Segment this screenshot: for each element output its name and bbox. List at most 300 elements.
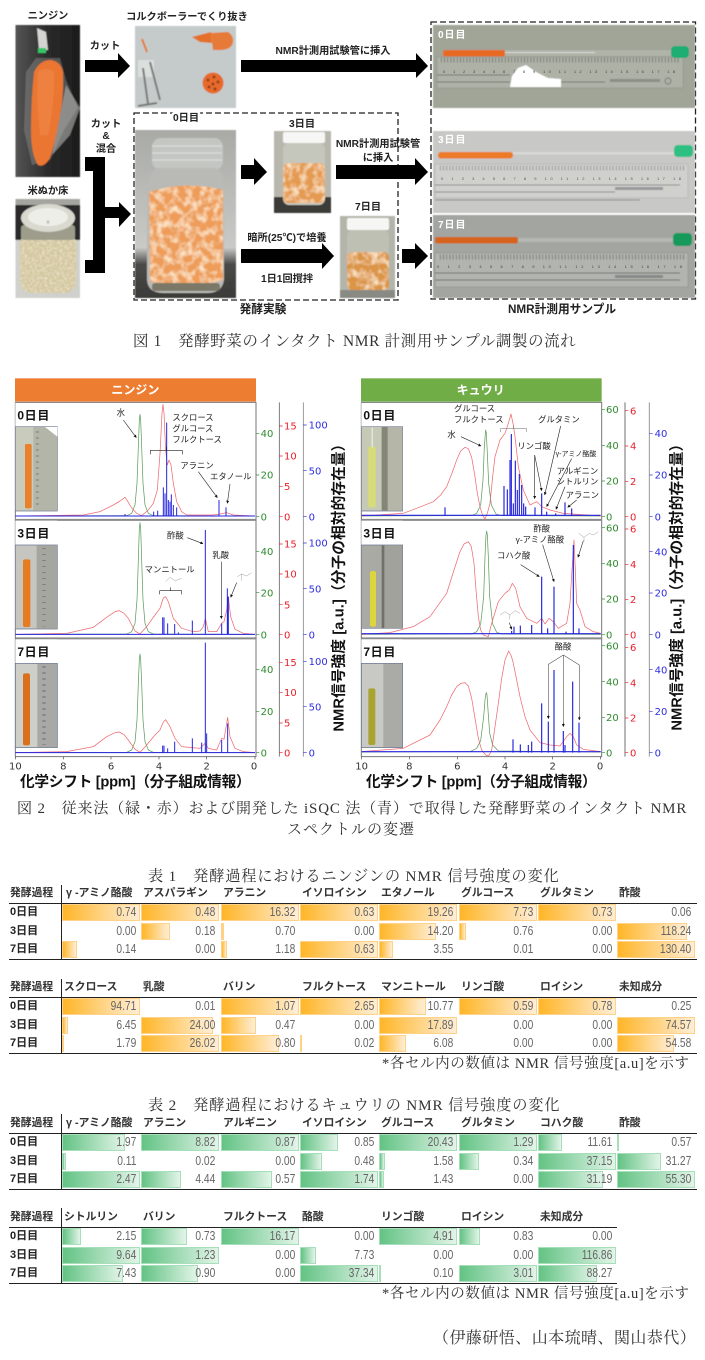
header row: γ -アミノ酪酸 xyxy=(66,1117,132,1129)
y axis title: cucumber: NMR信号強度 [a.u.]（分子の相対的存在量） xyxy=(668,437,686,731)
table 1a: carrot xyxy=(9,885,697,960)
green axis: cucumber: 60 xyxy=(606,405,619,416)
row day 3: 7.73 xyxy=(354,1248,374,1262)
row day 3: 3日目 xyxy=(10,924,38,936)
row day 3: 3日目 xyxy=(10,1018,38,1030)
label: NMR samples: NMR計測用サンプル xyxy=(508,302,616,316)
x ticks: carrot: 2 xyxy=(203,762,210,773)
header row: グルコース xyxy=(461,887,514,899)
row day 0: 8.82 xyxy=(195,1135,215,1149)
green axis: carrot: 0 xyxy=(261,512,267,523)
row day 3: 0.00 xyxy=(513,1018,533,1032)
row day 7: 7.43 xyxy=(116,1266,136,1280)
label: day 7 sample: 7日目 xyxy=(438,219,467,231)
annotations: cucumber: アルギニン xyxy=(557,466,598,476)
annotations: carrot: 水 xyxy=(117,407,126,417)
annotations: cucumber: 水 xyxy=(447,429,456,439)
caption: figure 1: 図 1 発酵野菜のインタクト NMR 計測用サンプル調製の流れ xyxy=(133,333,576,350)
spectrum: carrot day 3 xyxy=(15,523,255,634)
header row: グルタミン xyxy=(461,1117,515,1129)
header row: リンゴ酸 xyxy=(461,981,504,993)
arrow: day 0 to day 7 xyxy=(241,243,334,269)
header row xyxy=(10,1116,641,1129)
inset: cucumber day 3: 3日目 xyxy=(363,526,396,540)
green axis: carrot: 20 xyxy=(261,588,273,599)
red axis: carrot: 15 xyxy=(284,422,297,433)
header row: 発酵過程 xyxy=(10,887,53,899)
row day 3: 0.48 xyxy=(354,1154,374,1168)
label: fermentation experiment: 発酵実験 xyxy=(240,302,287,316)
blue axis: carrot: 0 xyxy=(309,630,315,641)
row day 7: 26.02 xyxy=(189,1036,215,1050)
header row xyxy=(10,980,662,993)
photo: NMR tube day 3 xyxy=(433,131,695,213)
label: day 3 sample: 3日目 xyxy=(438,134,467,146)
x ticks: carrot: 8 xyxy=(60,762,67,773)
header row: マンニトール xyxy=(381,981,446,993)
label: incubation: 暗所(25℃)で培養 xyxy=(247,231,327,244)
red axis: carrot: 0 xyxy=(284,630,290,641)
label: cut and mix: & xyxy=(102,131,110,142)
header row: イソロイシン xyxy=(302,887,367,899)
row day 3: 0.34 xyxy=(513,1154,533,1168)
blue axis: carrot: 100 xyxy=(309,657,328,668)
green axis: cucumber: 20 xyxy=(606,477,619,488)
x ticks: cucumber: 2 xyxy=(549,762,556,773)
row day 7: 4.44 xyxy=(195,1172,215,1186)
row day 0: 0.73 xyxy=(592,905,612,919)
annotations: carrot: スクロース xyxy=(172,413,214,423)
annotations: cucumber: コハク酸 xyxy=(497,551,531,561)
header row: フルクトース xyxy=(302,981,366,993)
chart: carrot spectra xyxy=(9,378,347,791)
row day 0: 0.57 xyxy=(671,1135,691,1149)
red axis: cucumber: 6 xyxy=(630,406,636,417)
blue axis: carrot: 50 xyxy=(309,584,321,595)
row day 7: 0.00 xyxy=(275,1266,295,1280)
row day 0: 0.83 xyxy=(513,1229,533,1243)
x ticks: cucumber: 10 xyxy=(355,762,368,773)
row day 7 xyxy=(10,941,695,958)
row day 0: 16.32 xyxy=(269,905,295,919)
green axis: cucumber: 60 xyxy=(606,641,619,652)
header row: グルタミン xyxy=(540,887,594,899)
header row: 酢酸 xyxy=(619,887,641,899)
header: carrot: ニンジン xyxy=(111,383,159,397)
header row: 発酵過程 xyxy=(10,981,53,993)
row day 7: 7日目 xyxy=(10,1267,38,1279)
label: insert into tube (2 lines): NMR計測用試験管 xyxy=(336,137,420,150)
row day 0: 20.43 xyxy=(427,1135,453,1149)
blue axis: cucumber: 40 xyxy=(655,547,667,558)
photo: NMR tube day 3: 0 1 2 3 4 5 6 7 8 9 10 11 12 13 14 15 16 17 18 xyxy=(441,176,682,181)
row day 0: 2.65 xyxy=(354,999,374,1013)
blue axis: carrot xyxy=(309,421,328,759)
row day 3: 0.00 xyxy=(592,924,612,938)
blue axis: cucumber: 20 xyxy=(655,707,667,718)
green axis: carrot: 20 xyxy=(261,471,273,482)
x ticks: cucumber: 8 xyxy=(406,762,413,773)
row day 0: 10.77 xyxy=(427,999,453,1013)
green axis: cucumber xyxy=(606,405,619,759)
row day 7: 0.02 xyxy=(354,1036,374,1050)
red axis: carrot: 0 xyxy=(284,748,290,759)
red axis: cucumber: 0 xyxy=(630,630,636,641)
header: carrot xyxy=(15,378,256,402)
annotations: cucumber: グルタミン xyxy=(538,414,580,424)
red axis: cucumber: 2 xyxy=(630,714,636,725)
x ticks: carrot: 10 xyxy=(9,762,22,773)
header row: γ -アミノ酪酸 xyxy=(66,887,132,899)
row day 7: 130.40 xyxy=(660,942,691,956)
green axis: cucumber: 0 xyxy=(606,512,612,523)
spectrum: cucumber day 0 xyxy=(362,414,601,519)
row day 3: 17.89 xyxy=(427,1018,453,1032)
arrow: to NMR sample day 0 xyxy=(241,53,428,78)
header row: ロイシン xyxy=(461,1211,504,1223)
row day 3: 0.00 xyxy=(433,1248,453,1262)
row day 0: 0.48 xyxy=(195,905,215,919)
red axis: carrot: 15 xyxy=(284,658,297,669)
row day 0: 0.00 xyxy=(592,1229,612,1243)
spectrum: carrot day 7 xyxy=(15,643,255,753)
inset: carrot day 3 xyxy=(15,521,57,629)
arrow: day 0 to day 3 xyxy=(241,158,267,185)
row day 0: 2.15 xyxy=(116,1229,136,1243)
header row: グルコース xyxy=(381,1117,434,1129)
green axis: cucumber: 40 xyxy=(606,441,619,452)
label: cork borer: コルクボーラーでくり抜き xyxy=(126,10,248,23)
arrow: bracket to jar xyxy=(85,157,131,273)
red axis: cucumber: 6 xyxy=(630,643,636,654)
row day 7: 55.30 xyxy=(665,1172,691,1186)
row day 7: 0.00 xyxy=(592,942,612,956)
row day 7: 2.47 xyxy=(116,1172,136,1186)
row day 0: 1.29 xyxy=(513,1135,533,1149)
header row: リンゴ酸 xyxy=(381,1211,424,1223)
red axis: cucumber: 2 xyxy=(630,595,636,606)
row day 7: 7日目 xyxy=(10,1037,38,1049)
green axis: carrot: 0 xyxy=(261,630,267,641)
table 1b: carrot xyxy=(9,979,697,1054)
photo: NMR tube day 0: 0 1 2 3 4 5 6 7 8 9 10 11 12 13 14 15 16 17 18 xyxy=(443,69,676,74)
label: cut and mix xyxy=(91,118,121,155)
row day 0: 0.63 xyxy=(354,905,374,919)
label: cut and mix: 混合 xyxy=(96,142,117,155)
row day 7: 7日目 xyxy=(10,943,38,955)
green axis: carrot: 40 xyxy=(261,429,273,440)
row day 3 xyxy=(10,1153,691,1170)
red axis: carrot xyxy=(284,422,297,759)
row day 0: 7.73 xyxy=(513,905,533,919)
label: insert into NMR tube: NMR計測用試験管に挿入 xyxy=(276,44,390,57)
header row: アスパラギン xyxy=(143,887,208,899)
row day 7: 0.00 xyxy=(513,1036,533,1050)
arrow: day 7 to NMR sample xyxy=(402,243,428,269)
row day 3: 6.45 xyxy=(116,1018,136,1032)
x ticks: carrot: 6 xyxy=(108,762,114,773)
photo: NMR tube day 0 xyxy=(433,25,695,108)
red axis: carrot: 5 xyxy=(284,482,290,493)
label: day 0 sample: 0日目 xyxy=(438,29,467,41)
blue axis: carrot: 0 xyxy=(309,512,315,523)
blue axis: carrot: 50 xyxy=(309,702,321,713)
blue axis: carrot: 100 xyxy=(309,421,328,432)
row day 0: 0.25 xyxy=(671,999,691,1013)
x ticks: carrot: 4 xyxy=(156,762,162,773)
panel: fermentation experiment xyxy=(134,112,428,300)
header row: アルギニン xyxy=(223,1117,277,1129)
row day 0: 94.71 xyxy=(110,999,136,1013)
row day 7: 0.00 xyxy=(195,942,215,956)
photo: NMR tube day 7: 0 1 2 3 4 5 6 7 8 9 10 11 12 13 14 15 16 17 18 xyxy=(437,264,683,269)
chart: cucumber spectra xyxy=(355,378,686,791)
row day 0: 0.73 xyxy=(195,1229,215,1243)
annotations: cucumber: 酢酸 xyxy=(533,524,551,534)
green axis: carrot: 40 xyxy=(261,547,273,558)
panel: NMR samples xyxy=(431,22,696,299)
row day 7 xyxy=(10,1265,612,1282)
header row: 酪酸 xyxy=(302,1211,324,1223)
blue axis: carrot: 100 xyxy=(309,539,328,550)
red axis: cucumber: 4 xyxy=(630,442,636,453)
row day 7: 1.18 xyxy=(275,942,295,956)
row day 0: 0.01 xyxy=(195,999,215,1013)
row day 3: 0.02 xyxy=(195,1154,215,1168)
x axis title: cucumber: 化学シフト [ppm]（分子組成情報） xyxy=(366,773,597,791)
row day 3: 0.00 xyxy=(116,924,136,938)
inset: carrot day 7 xyxy=(15,639,57,748)
inset: cucumber day 0 xyxy=(361,403,403,511)
annotations: cucumber: γ-アミノ酪酸 xyxy=(516,534,565,544)
row day 0: 0日目 xyxy=(10,906,38,918)
blue axis: cucumber: 40 xyxy=(655,665,667,676)
annotations: cucumber: グルコース xyxy=(454,404,495,414)
row day 3 xyxy=(10,923,691,940)
row day 7: 0.14 xyxy=(116,942,136,956)
row day 3: 0.00 xyxy=(354,1018,374,1032)
annotations: carrot: マンニトール xyxy=(145,564,195,574)
label: insert into tube (2 lines) xyxy=(336,137,420,164)
row day 3: 0.11 xyxy=(117,1154,136,1168)
row day 7: 0.57 xyxy=(275,1172,295,1186)
row day 3: 0.18 xyxy=(195,924,215,938)
header row: アラニン xyxy=(143,1117,186,1129)
red axis: cucumber: 2 xyxy=(630,477,636,488)
spectrum: carrot day 0 xyxy=(15,404,255,516)
header row: スクロース xyxy=(64,981,117,993)
red axis: cucumber: 4 xyxy=(630,678,636,689)
annotations: carrot: アラニン xyxy=(180,460,214,470)
inset: cucumber day 3 xyxy=(361,521,403,628)
header: cucumber: キュウリ xyxy=(457,383,505,397)
x ticks: carrot xyxy=(9,762,257,773)
panel frame xyxy=(361,402,602,757)
row day 0: 0.74 xyxy=(116,905,136,919)
row day 7: 0.10 xyxy=(433,1266,453,1280)
row day 0: 1.07 xyxy=(275,999,295,1013)
row day 3: 24.00 xyxy=(189,1018,215,1032)
green axis: cucumber: 60 xyxy=(606,523,619,534)
header row: 酢酸 xyxy=(619,1117,641,1129)
label: insert into tube (2 lines): に挿入 xyxy=(363,151,393,164)
axes: carrot xyxy=(9,402,328,773)
row day 3: 0.00 xyxy=(275,1154,295,1168)
table 2b: cucumber xyxy=(9,1208,617,1284)
blue axis: cucumber: 20 xyxy=(655,471,667,482)
row day 7: 0.63 xyxy=(354,942,374,956)
green axis: cucumber: 20 xyxy=(606,595,619,606)
header row: ロイシン xyxy=(540,981,583,993)
header row: コハク酸 xyxy=(540,1117,583,1129)
row day 0: 0日目 xyxy=(10,1230,38,1242)
inset: carrot day 3: 3日目 xyxy=(17,526,50,540)
inset: carrot day 0 xyxy=(15,403,57,511)
row day 0 xyxy=(10,1228,612,1245)
row day 3: 1.58 xyxy=(433,1154,453,1168)
row day 0: 0.59 xyxy=(513,999,533,1013)
row day 0: 1.97 xyxy=(116,1135,136,1149)
row day 3: 3日目 xyxy=(10,1248,38,1260)
label: day 0: 0日目 xyxy=(173,112,199,124)
row day 0 xyxy=(10,1134,691,1151)
arrow: day 3 to NMR sample xyxy=(336,158,428,185)
authors: （伊藤研悟、山本琉晴、関山恭代） xyxy=(433,1330,696,1347)
red axis: carrot: 10 xyxy=(284,570,297,581)
label: daily stirring: 1日1回撹拌 xyxy=(261,272,313,285)
y axis title: carrot: NMR信号強度 [a.u.]（分子の相対的存在量） xyxy=(329,437,347,732)
row day 3: 1.23 xyxy=(195,1248,215,1262)
red axis: carrot: 5 xyxy=(284,600,290,611)
header row: バリン xyxy=(223,981,255,993)
photo: carrot in bag xyxy=(16,25,80,177)
label: rice bran bed: 米ぬか床 xyxy=(28,184,69,197)
row day 7: 1.43 xyxy=(433,1172,453,1186)
photo: NMR tube day 7 xyxy=(433,215,695,298)
spectrum: cucumber day 7 xyxy=(362,651,601,756)
row day 7: 0.00 xyxy=(592,1036,612,1050)
x ticks: cucumber: 4 xyxy=(502,762,508,773)
annotations: cucumber: フルクトース xyxy=(454,414,504,424)
table 2a: cucumber xyxy=(9,1114,697,1190)
annotations: carrot: 酢酸 xyxy=(167,531,184,541)
figure 2: NMR spectra xyxy=(9,378,686,791)
annotations: cucumber: シトルリン xyxy=(557,477,598,487)
annotations: cucumber: リンゴ酸 xyxy=(517,441,551,451)
note: table 2: *各セル内の数値は NMR 信号強度[a.u]を示す xyxy=(382,1286,690,1302)
green axis: cucumber: 0 xyxy=(606,748,612,759)
row day 3: 0.76 xyxy=(513,924,533,938)
row day 7: 7日目 xyxy=(10,1173,38,1185)
blue axis: carrot: 0 xyxy=(309,748,315,759)
green axis: cucumber: 0 xyxy=(606,630,612,641)
x ticks: cucumber xyxy=(355,762,603,773)
annotations: carrot: グルコース xyxy=(172,424,213,434)
header row: アラニン xyxy=(223,887,266,899)
axes: cucumber xyxy=(355,402,667,773)
green axis: carrot: 20 xyxy=(261,707,273,718)
header: cucumber xyxy=(361,378,602,402)
green axis: carrot xyxy=(261,429,273,759)
red axis: carrot: 10 xyxy=(284,688,297,699)
header row xyxy=(10,886,641,899)
caption: figure 2 line 2: スペクトルの変遷 xyxy=(287,822,415,838)
inset: cucumber day 7: 7日目 xyxy=(363,645,396,659)
x ticks: cucumber: 6 xyxy=(454,762,461,773)
caption: figure 2 line 1: 図 2 従来法（緑・赤）および開発した iSQC 法（青）で取得した発酵野菜のインタクト NMR xyxy=(17,801,687,817)
figure 1: sample preparation flow xyxy=(14,10,696,316)
red axis: cucumber xyxy=(630,406,636,759)
header row: バリン xyxy=(143,1211,175,1223)
annotations: carrot: フルクトース xyxy=(172,434,222,444)
blue axis: cucumber: 20 xyxy=(655,589,667,600)
annotations: carrot: 乳酸 xyxy=(212,550,230,560)
inset: cucumber day 0: 0日目 xyxy=(363,408,396,422)
row day 3: 37.15 xyxy=(586,1154,612,1168)
blue axis: carrot: 50 xyxy=(309,466,321,477)
row day 0: 4.91 xyxy=(433,1229,453,1243)
blue axis: cucumber: 0 xyxy=(655,512,661,523)
row day 0 xyxy=(10,904,691,921)
inset: carrot day 7: 7日目 xyxy=(17,645,50,659)
row day 0: 16.17 xyxy=(269,1229,295,1243)
header row: 発酵過程 xyxy=(10,1117,53,1129)
annotations: cucumber: γ-アミノ酪酸 xyxy=(556,449,596,458)
photo: jar day 0 xyxy=(135,130,236,298)
header row: イソロイシン xyxy=(302,1117,367,1129)
row day 0: 0日目 xyxy=(10,1000,38,1012)
row day 3: 0.00 xyxy=(513,1248,533,1262)
row day 3: 0.00 xyxy=(354,924,374,938)
row day 3: 0.00 xyxy=(275,1248,295,1262)
title: table 1: 表 1 発酵過程におけるニンジンの NMR 信号強度の変化 xyxy=(148,868,560,885)
row day 7: 88.27 xyxy=(586,1266,612,1280)
green axis: cucumber: 20 xyxy=(606,713,619,724)
header row: エタノール xyxy=(381,887,435,899)
title: table 2: 表 2 発酵過程におけるキュウリの NMR 信号強度の変化 xyxy=(148,1097,560,1114)
row day 3: 3日目 xyxy=(10,1154,38,1166)
label: day 3: 3日目 xyxy=(289,118,315,130)
header row: シトルリン xyxy=(64,1211,118,1223)
row day 3: 0.47 xyxy=(275,1018,295,1032)
row day 3: 118.24 xyxy=(660,924,691,938)
green axis: cucumber: 40 xyxy=(606,677,619,688)
row day 7: 1.79 xyxy=(116,1036,136,1050)
label: carrot: ニンジン xyxy=(28,10,68,22)
blue axis: cucumber: 0 xyxy=(655,748,661,759)
green axis: carrot: 0 xyxy=(261,748,267,759)
row day 7 xyxy=(10,1171,695,1188)
header row: 未知成分 xyxy=(619,981,662,993)
row day 0: 0.87 xyxy=(275,1135,295,1149)
header row: フルクトース xyxy=(223,1211,287,1223)
row day 7: 0.90 xyxy=(195,1266,215,1280)
photo: jar day 7 xyxy=(340,216,395,298)
blue axis: cucumber: 0 xyxy=(655,630,661,641)
header row: 発酵過程 xyxy=(10,1211,53,1223)
blue axis: cucumber: 40 xyxy=(655,429,667,440)
row day 0: 11.61 xyxy=(587,1135,612,1149)
row day 7: 54.58 xyxy=(665,1036,691,1050)
row day 7: 0.01 xyxy=(513,942,533,956)
photo: cork borer xyxy=(135,26,236,108)
red axis: carrot: 10 xyxy=(284,452,297,463)
row day 7: 0.00 xyxy=(513,1172,533,1186)
row day 0: 0日目 xyxy=(10,1136,38,1148)
x ticks: carrot: 0 xyxy=(251,762,257,773)
row day 7: 6.08 xyxy=(433,1036,453,1050)
row day 7: 31.19 xyxy=(586,1172,612,1186)
